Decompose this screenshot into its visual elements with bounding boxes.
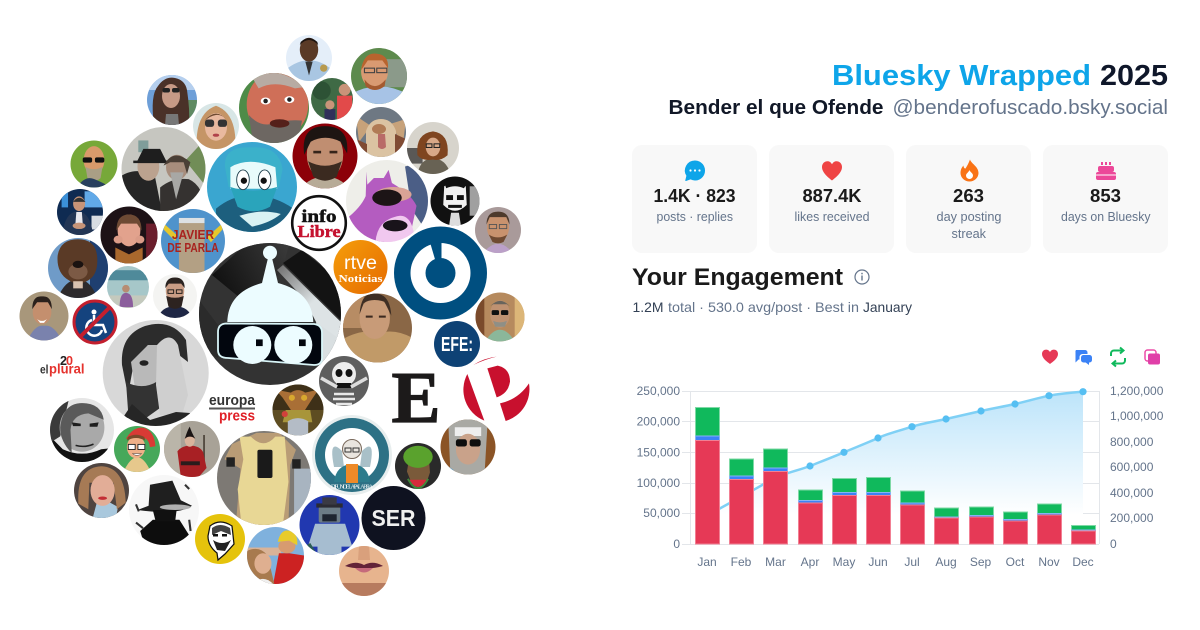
right axis labels: 1,000,000 <box>1110 409 1164 423</box>
avatar: Difunde la Palabra seal <box>312 415 392 495</box>
avatar: blue Heisenberg robot <box>300 495 360 555</box>
avatar: Público P logo <box>463 357 529 421</box>
icon: quotes copy <box>1145 350 1160 364</box>
avatar: Cadena SER logo: SER <box>372 505 416 531</box>
icon: heart <box>822 161 842 180</box>
month labels: Jan <box>697 555 717 569</box>
engagement summary: January <box>863 299 912 315</box>
avatar: El Español E logo: E <box>392 357 440 438</box>
month labels: Sep <box>970 555 991 569</box>
icon: reposts <box>1111 348 1125 366</box>
cumulative data points <box>806 388 1087 470</box>
avatar: Cadena SER logo <box>362 486 426 550</box>
logo: elplural: plural <box>49 360 84 376</box>
avatar: cartoon beast <box>356 107 406 157</box>
logo: europa press <box>209 392 256 424</box>
right axis labels: 200,000 <box>1110 511 1154 525</box>
avatar: disabled parking sign <box>74 301 116 343</box>
right axis labels: 0 <box>1110 537 1117 551</box>
heading: Your Engagement: Your Engagement <box>632 264 843 291</box>
stat value: 887.4K <box>802 186 862 206</box>
month labels: May <box>833 555 855 569</box>
icon: flame <box>960 160 978 182</box>
cumulative line <box>707 392 1083 516</box>
avatar: music note detective <box>135 480 192 545</box>
stat value: 853 <box>1090 186 1121 206</box>
stat value: 1.4K · 823 <box>654 186 736 206</box>
avatar: watermelon head <box>395 443 441 489</box>
stat label <box>936 210 1002 241</box>
month labels: Jun <box>868 555 888 569</box>
stat label: likes received <box>794 210 870 224</box>
logo: europa press: press <box>219 408 255 424</box>
cumulative area <box>707 392 1083 544</box>
logo: europa press: europa <box>209 392 256 409</box>
month labels: Oct <box>1006 555 1025 569</box>
display name and handle: @benderofuscado.bsky.social <box>892 97 1168 119</box>
avatar: Difunde la Palabra seal: DIFUNDE LA PALABRA <box>331 484 374 490</box>
left axis labels: 150,000 <box>637 446 680 460</box>
icon: message bubble <box>685 160 705 181</box>
chart: monthly engagement <box>637 384 1164 569</box>
avatar: bald man with sunglasses <box>70 140 118 188</box>
avatar: blonde with sunglasses <box>193 103 239 149</box>
engagement summary <box>632 299 912 315</box>
left axis labels <box>637 384 680 551</box>
stat value: 263 <box>953 186 984 206</box>
avatar: bearded man closeup <box>239 71 309 143</box>
avatar: Groucho Marx sketch <box>430 176 480 226</box>
month labels: Apr <box>801 555 819 569</box>
avatar: man with glasses and beard <box>153 274 197 318</box>
right axis labels: 800,000 <box>1110 435 1154 449</box>
panel: posting streak <box>906 145 1031 253</box>
avatar: yellow caricature <box>195 514 245 564</box>
avatar: child on beach <box>107 266 149 308</box>
avatar: Javier de Parla: DE PARLA <box>167 240 219 255</box>
right axis labels <box>1110 384 1164 551</box>
month labels: Dec <box>1072 555 1094 569</box>
icon: likes heart <box>1042 350 1058 364</box>
month labels: Nov <box>1038 555 1060 569</box>
left axis labels: 50,000 <box>643 506 680 520</box>
title: 2025 <box>1100 60 1168 92</box>
display name and handle: Bender el que Ofende <box>668 97 884 119</box>
left axis labels: 0 <box>673 537 680 551</box>
avatar: RTVE Noticias logo <box>334 240 388 294</box>
avatar: infoLibre logo <box>292 196 346 250</box>
panel: days on Bluesky <box>1043 145 1168 253</box>
avatar: skeleton <box>319 356 369 406</box>
avatar: woman with sunglasses <box>147 75 197 125</box>
panel: likes received <box>769 145 894 253</box>
avatar: dog-headed person <box>48 238 108 298</box>
icon: info <box>855 270 869 284</box>
month labels: Aug <box>935 555 957 569</box>
stacked bars: replies <box>696 436 1096 531</box>
avatar: EFE logo <box>434 321 480 367</box>
logo: elplural <box>40 353 84 376</box>
stat label: days on Bluesky <box>1061 210 1151 224</box>
avatar: red background bearded man <box>292 124 358 188</box>
month labels <box>697 555 1094 569</box>
avatar: RTVE Noticias logo: rtve <box>344 253 377 274</box>
avatar: man covering eye, grayscale <box>102 320 210 430</box>
avatar: infoLibre logo: Libre <box>297 222 341 241</box>
avatar: woman and yellow hat <box>247 527 304 584</box>
stat label: day posting <box>936 210 1002 224</box>
avatar: Javier de Parla <box>161 209 225 273</box>
left axis labels: 200,000 <box>637 414 680 428</box>
avatar: curly haired woman <box>407 122 459 174</box>
avatar: orange hair man <box>351 48 407 104</box>
avatar: Anthony Hopkins portrait <box>50 398 114 462</box>
grid lines <box>682 391 1100 544</box>
avatar: moustache lips <box>339 546 389 596</box>
left axis labels: 100,000 <box>637 476 680 490</box>
month labels: Mar <box>765 555 786 569</box>
logo: elplural: 0 <box>66 353 73 368</box>
avatar: Javier de Parla: JAVIER <box>172 227 214 242</box>
avatar: blue ring logo <box>394 226 487 320</box>
engagement summary: 1.2M <box>632 299 664 315</box>
logo: elplural: el <box>40 362 48 376</box>
logo: elplural: 2 <box>60 353 67 368</box>
avatar: man pulling face <box>100 206 158 264</box>
panel: posts and replies <box>632 145 757 253</box>
month labels: Feb <box>731 555 752 569</box>
stacked bars: reposts <box>696 408 1096 530</box>
avatar: warrior in red <box>164 421 220 477</box>
right axis labels: 600,000 <box>1110 460 1154 474</box>
avatar: nun with sunglasses <box>440 420 496 476</box>
avatar: Bender robot <box>199 240 345 385</box>
left axis labels: 250,000 <box>637 384 680 398</box>
avatar: kids among plants <box>311 78 353 122</box>
avatar: goblin figure <box>272 384 324 436</box>
avatar: smiling man with glasses <box>475 207 521 253</box>
right axis labels: 400,000 <box>1110 486 1154 500</box>
engagement summary: total · 530.0 avg/post · Best in <box>668 299 859 315</box>
avatar: purple caped cartoon <box>346 160 428 242</box>
right axis labels: 1,200,000 <box>1110 384 1164 398</box>
avatar: man with sunglasses and green shirt <box>476 292 524 342</box>
avatar: RTVE Noticias logo: Noticias <box>338 273 383 285</box>
stat label: posts · replies <box>656 210 733 224</box>
avatar: man in TV studio <box>57 189 103 235</box>
avatar: officer <box>286 35 332 81</box>
month labels: Jul <box>904 555 920 569</box>
avatar: EFE logo: EFE: <box>441 334 473 356</box>
stat label: streak <box>952 227 987 241</box>
display name and handle <box>668 97 1168 119</box>
icon: replies bubbles <box>1075 350 1092 365</box>
avatar: woman smiling with glasses <box>20 292 68 340</box>
stacked bars: likes <box>696 440 1096 544</box>
avatar: gym selfie <box>217 431 311 525</box>
avatar: Christmas cartoon <box>114 426 160 472</box>
avatar: sweater man <box>343 293 412 362</box>
avatar: curly red-haired woman <box>74 463 129 518</box>
avatar: El Español E logo <box>375 357 457 439</box>
avatar: two men with hat <box>122 127 206 211</box>
title: Bluesky Wrapped <box>832 60 1091 92</box>
avatar: blue cartoon character <box>207 142 297 232</box>
chart legend <box>1042 348 1160 366</box>
panel: avatar bubble cluster <box>20 35 529 596</box>
avatar: infoLibre logo: info <box>302 206 336 226</box>
icon: cake <box>1096 162 1116 180</box>
